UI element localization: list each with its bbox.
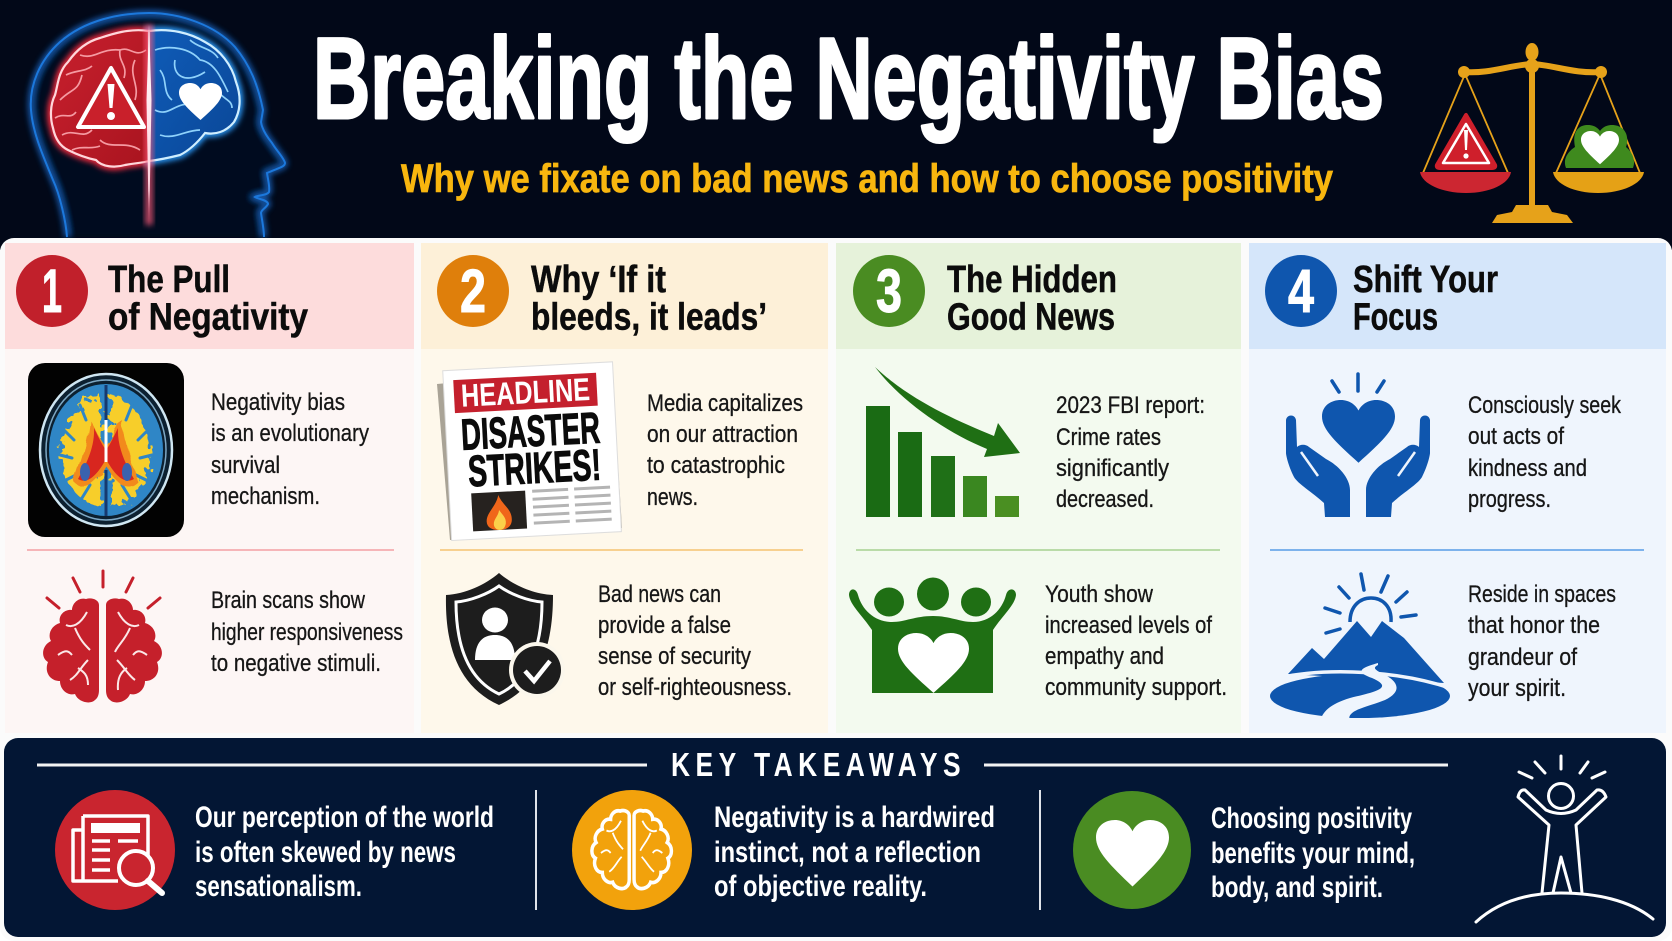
text: media: news. bbox=[647, 484, 698, 511]
icon: newspaper: DISASTER bbox=[460, 404, 601, 460]
background: dark header bbox=[0, 0, 1672, 250]
text: takeaway 1: sensationalism. bbox=[195, 870, 362, 903]
icon: mountain with sun and river bbox=[1270, 574, 1450, 722]
subtitle: Why we fixate on bad news and how to choose positivity bbox=[401, 157, 1334, 201]
badge 4 bbox=[1265, 255, 1337, 327]
text: youth: increased levels of bbox=[1045, 612, 1212, 639]
heading 2 bbox=[531, 259, 767, 338]
heading 3: The Hidden bbox=[947, 259, 1117, 301]
icon: balance scale bbox=[1420, 43, 1644, 223]
text: spaces: your spirit. bbox=[1468, 675, 1566, 702]
text: false security: sense of security bbox=[598, 643, 752, 670]
text: takeaway 1 bbox=[195, 801, 494, 903]
text: evolutionary mechanism: mechanism. bbox=[211, 483, 320, 510]
chart: falling crime bars with arrow bbox=[866, 367, 1020, 517]
icon: warning triangle in brain bbox=[78, 68, 144, 127]
heading: key takeaways: KEY TAKEAWAYS bbox=[671, 747, 961, 784]
icon: heart badge bbox=[1073, 791, 1191, 909]
icon: heart in brain bbox=[179, 83, 222, 120]
icon: brain scan bbox=[28, 363, 184, 537]
text: media: Media capitalizes bbox=[647, 390, 803, 417]
heading 3: Good News bbox=[947, 296, 1115, 338]
text: spaces bbox=[1468, 581, 1616, 702]
text: kindness: out acts of bbox=[1468, 423, 1564, 450]
panel: key takeaways bbox=[4, 738, 1666, 937]
panel: column 3 bbox=[836, 243, 1241, 733]
badge 1 bbox=[16, 255, 88, 327]
badge 1: 1 bbox=[42, 257, 62, 325]
text: FBI report: 2023 FBI report: bbox=[1056, 392, 1205, 419]
heading 3 bbox=[947, 259, 1117, 338]
text: takeaway 3: Choosing positivity bbox=[1211, 802, 1412, 835]
panel: column 4 bbox=[1249, 243, 1666, 733]
text: evolutionary mechanism: Negativity bias bbox=[211, 389, 345, 416]
heading 4: Focus bbox=[1353, 296, 1438, 338]
heading 1: The Pull bbox=[108, 259, 230, 301]
heading 4 bbox=[1353, 259, 1498, 338]
icon: community with heart bbox=[849, 578, 1016, 693]
icon: news with magnifier bbox=[55, 790, 175, 910]
text: takeaway 2 bbox=[714, 801, 995, 903]
text: brain scans bbox=[211, 587, 403, 677]
badge 2 bbox=[437, 255, 509, 327]
text: media: to catastrophic bbox=[647, 452, 785, 479]
text: youth: community support. bbox=[1045, 674, 1227, 701]
text: false security: Bad news can bbox=[598, 581, 721, 608]
icon: hands holding heart bbox=[1286, 374, 1430, 517]
text: takeaway 1: is often skewed by news bbox=[195, 836, 456, 869]
text: false security: provide a false bbox=[598, 612, 731, 639]
text: FBI report: Crime rates bbox=[1056, 424, 1161, 451]
text: kindness: Consciously seek bbox=[1468, 392, 1622, 419]
text: kindness bbox=[1468, 392, 1622, 513]
text: media bbox=[647, 390, 803, 511]
text: youth bbox=[1045, 581, 1227, 701]
badge 3 bbox=[853, 255, 925, 327]
text: brain scans: to negative stimuli. bbox=[211, 650, 381, 677]
icon: brain outline bbox=[572, 790, 692, 910]
text: FBI report bbox=[1056, 392, 1205, 513]
text: brain scans: higher responsiveness bbox=[211, 619, 403, 646]
heading 4: Shift Your bbox=[1353, 259, 1498, 301]
text: FBI report: significantly bbox=[1056, 455, 1170, 482]
text: spaces: Reside in spaces bbox=[1468, 581, 1616, 608]
text: spaces: that honor the bbox=[1468, 612, 1600, 639]
text: kindness: kindness and bbox=[1468, 455, 1587, 482]
text: kindness: progress. bbox=[1468, 486, 1551, 513]
badge 2: 2 bbox=[460, 257, 486, 325]
badge 3: 3 bbox=[876, 257, 902, 325]
icon: newspaper: STRIKES! bbox=[467, 441, 602, 496]
text: evolutionary mechanism: survival bbox=[211, 452, 280, 479]
heading 2: Why ‘If it bbox=[531, 259, 666, 301]
text: takeaway 2: of objective reality. bbox=[714, 870, 927, 903]
icon: person with raised arms on hill bbox=[1476, 756, 1653, 922]
panel: column 2 bbox=[421, 243, 828, 733]
heading 1: of Negativity bbox=[108, 296, 308, 338]
icon: newspaper bbox=[437, 362, 622, 540]
text: youth: empathy and bbox=[1045, 643, 1164, 670]
text: youth: Youth show bbox=[1045, 581, 1153, 608]
text: FBI report: decreased. bbox=[1056, 486, 1154, 513]
text: media: on our attraction bbox=[647, 421, 798, 448]
panel: white frame bbox=[0, 238, 1672, 941]
text: spaces: grandeur of bbox=[1468, 644, 1577, 671]
text: evolutionary mechanism: is an evolutionary bbox=[211, 420, 370, 447]
text: takeaway 3: benefits your mind, bbox=[1211, 837, 1415, 870]
heading 1 bbox=[108, 259, 308, 338]
text: takeaway 3 bbox=[1211, 802, 1415, 904]
text: brain scans: Brain scans show bbox=[211, 587, 365, 614]
text: takeaway 3: body, and spirit. bbox=[1211, 871, 1383, 904]
text: takeaway 2: Negativity is a hardwired bbox=[714, 801, 995, 834]
icon: glowing head with split brain bbox=[31, 13, 285, 237]
heading 2: bleeds, it leads’ bbox=[531, 296, 767, 338]
icon: newspaper: HEADLINE bbox=[460, 371, 591, 414]
text: evolutionary mechanism bbox=[211, 389, 370, 510]
text: takeaway 2: instinct, not a reflection bbox=[714, 836, 981, 869]
text: false security: or self-righteousness. bbox=[598, 674, 792, 701]
icon: red brain with rays bbox=[43, 571, 162, 702]
badge 4: 4 bbox=[1288, 257, 1314, 325]
icon: shield with person bbox=[446, 573, 565, 705]
panel: column 1 bbox=[5, 243, 414, 733]
text: false security bbox=[598, 581, 792, 701]
text: takeaway 1: Our perception of the world bbox=[195, 801, 494, 834]
